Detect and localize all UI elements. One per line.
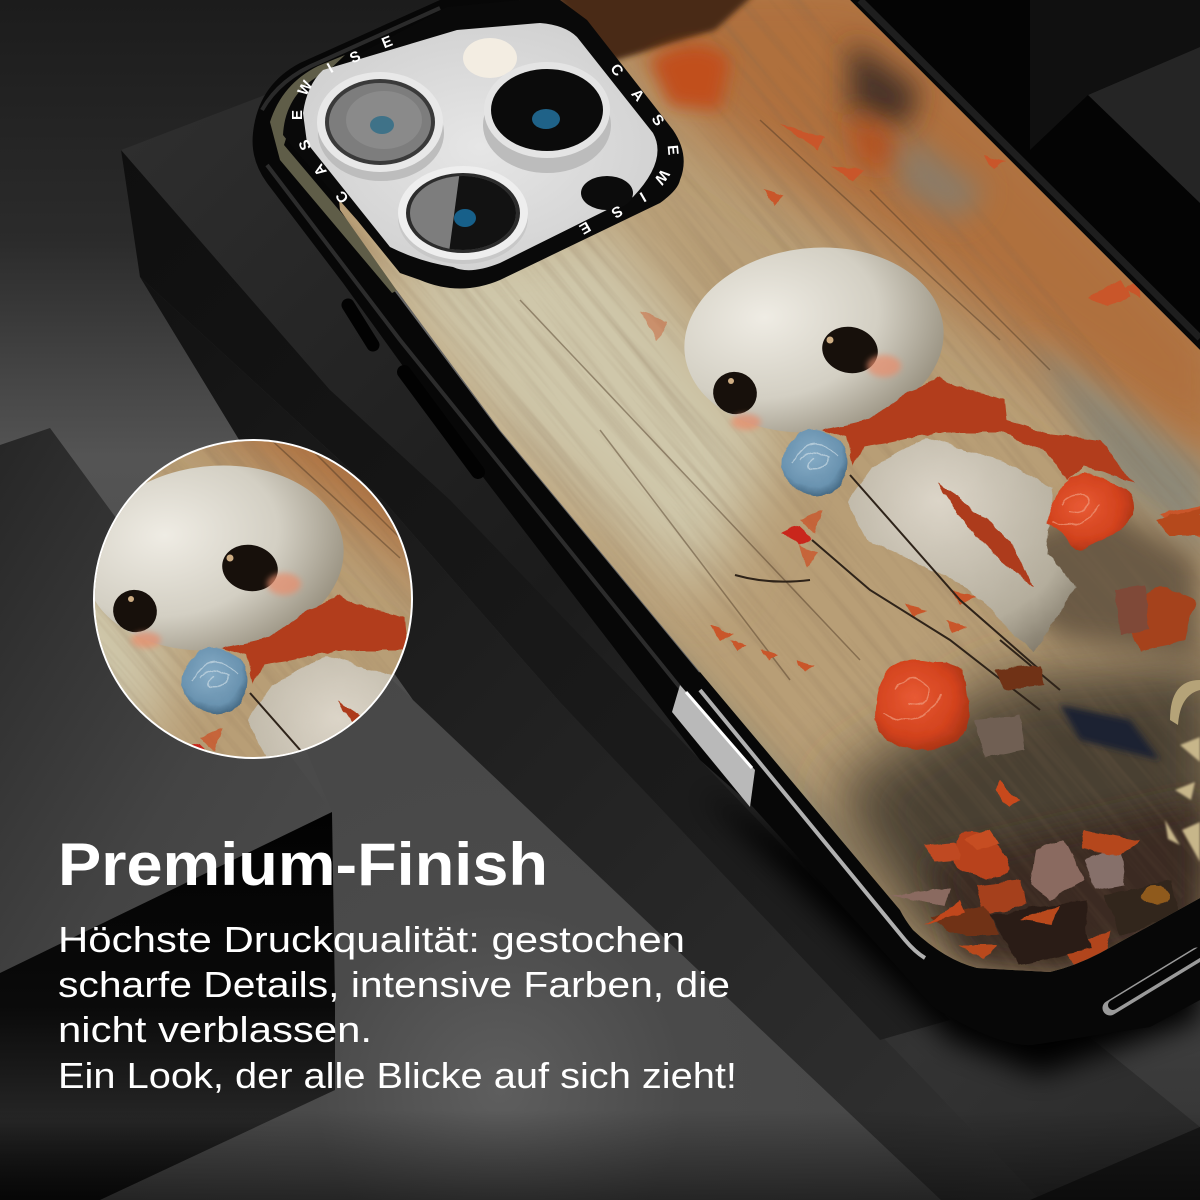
bumper lettering: I xyxy=(324,60,336,77)
robe xyxy=(847,437,1077,653)
bumper lettering: I xyxy=(637,188,649,205)
camera bumper xyxy=(283,0,684,288)
red roses xyxy=(782,474,1133,750)
phone case xyxy=(253,0,1200,1075)
magnified detail circle xyxy=(93,439,413,759)
phone artwork xyxy=(96,0,1200,972)
olive strip xyxy=(270,55,402,293)
camera glass xyxy=(303,23,658,270)
flower cluster xyxy=(890,510,1200,965)
bumper lettering: A xyxy=(310,160,330,179)
charging port xyxy=(1110,955,1197,1008)
eyes xyxy=(707,322,882,420)
bumper lettering: W xyxy=(650,166,673,188)
character and flowers xyxy=(520,0,1200,965)
blue rose xyxy=(782,430,848,496)
description text: nicht verblassen. xyxy=(58,1009,372,1050)
bumper lettering: S xyxy=(648,111,667,129)
description text xyxy=(58,919,737,1096)
bumper lettering: C xyxy=(607,61,627,80)
description text: Höchste Druckqualität: gestochen xyxy=(58,919,685,960)
lens bottom xyxy=(398,166,528,264)
cheeks xyxy=(731,355,901,430)
bumper lettering: E xyxy=(576,218,593,237)
bumper lettering: A xyxy=(628,86,648,105)
bumper lettering: E xyxy=(664,144,681,156)
bumper lettering: E xyxy=(289,110,306,120)
case body xyxy=(253,0,1200,1045)
rim highlights xyxy=(267,165,690,700)
bumper lettering: S xyxy=(296,137,315,152)
stems xyxy=(735,475,1060,710)
description text: Ein Look, der alle Blicke auf sich zieht! xyxy=(58,1055,737,1096)
lens top right xyxy=(483,62,611,173)
scarf xyxy=(823,377,1133,587)
title: Premium-Finish xyxy=(58,831,548,898)
bumper lettering: C xyxy=(332,187,352,206)
phone shadow xyxy=(700,790,1200,1075)
top painted texture xyxy=(560,0,754,63)
lens left xyxy=(317,72,444,181)
side buttons xyxy=(348,305,373,345)
bumper lettering: S xyxy=(347,48,363,67)
metal side button xyxy=(672,685,755,807)
description text: scharfe Details, intensive Farben, die xyxy=(58,964,730,1005)
microphone xyxy=(581,176,633,210)
camera module xyxy=(283,0,684,288)
bumper lettering: W xyxy=(295,77,317,99)
wood lines xyxy=(520,120,1050,680)
wood grain texture xyxy=(399,0,1180,938)
flash xyxy=(463,38,517,78)
bumper lettering xyxy=(289,33,681,237)
bumper lettering: S xyxy=(608,202,625,221)
head xyxy=(675,235,953,445)
bumper lettering: E xyxy=(379,33,395,52)
paint flecks xyxy=(640,125,1200,672)
